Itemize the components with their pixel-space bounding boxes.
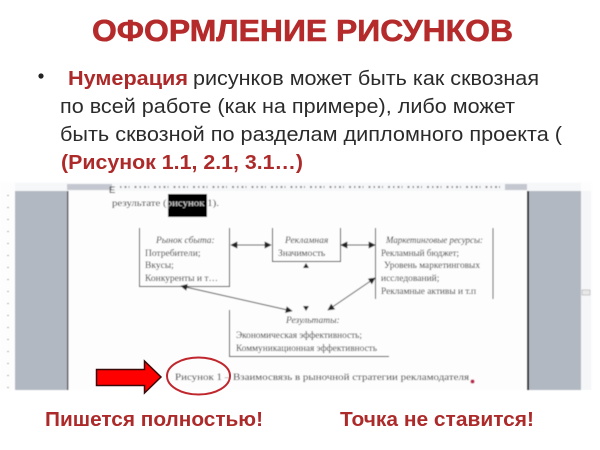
line 1: рисунков может быть как сквозная xyxy=(193,68,539,90)
right gray margin xyxy=(528,191,581,390)
document sentence with selection: результате ( рисунок 1). xyxy=(112,198,219,209)
left ruler xyxy=(7,195,9,388)
line 3: быть сквозной по разделам дипломного проекта ( xyxy=(60,124,562,146)
box: market: Конкуренты и т… xyxy=(145,274,218,284)
box: results: Результаты: xyxy=(285,316,340,326)
line 2: по всей работе (как на примере), либо может xyxy=(60,96,515,118)
arrow: market to advertising xyxy=(231,244,271,246)
box: results xyxy=(230,310,389,356)
red arrow xyxy=(96,361,161,393)
document screenshot xyxy=(0,182,592,390)
bullet text block xyxy=(38,68,562,174)
arrow heads: advertising to results xyxy=(303,263,309,311)
box: market: Рынок сбыта: xyxy=(155,235,215,246)
arrow: market to results xyxy=(181,286,292,311)
arrow: advertising to resources xyxy=(341,244,375,246)
bullet marker xyxy=(38,73,44,79)
scrollbar xyxy=(581,191,591,390)
title: ОФОРМЛЕНИЕ РИСУНКОВ xyxy=(92,13,513,48)
box: market xyxy=(140,228,230,286)
box: marketing resources xyxy=(376,228,493,299)
cursor glyph: Е xyxy=(109,185,115,196)
diagram xyxy=(140,228,493,356)
box: advertising: Рекламная xyxy=(284,236,328,246)
box: marketing resources: Рекламные активы и т.п xyxy=(381,287,476,297)
box: market: Вкусы; xyxy=(145,261,174,271)
white strip under screenshot xyxy=(165,390,235,396)
box: marketing resources: Рекламный бюджет; xyxy=(381,248,459,259)
red circle xyxy=(167,358,230,394)
window background xyxy=(0,182,592,390)
left gray margin xyxy=(15,191,67,390)
box: marketing resources: Уровень маркетинговых xyxy=(384,261,480,271)
box: results: Экономическая эффективность; xyxy=(236,330,362,341)
red period xyxy=(470,380,474,384)
box: marketing resources: исследований; xyxy=(381,273,439,284)
line 4 highlight: (Рисунок 1.1, 2.1, 3.1…) xyxy=(61,152,303,174)
document sentence with selection xyxy=(112,194,219,217)
box: marketing resources: Маркетинговые ресурсы: xyxy=(385,236,483,246)
line 1: Нумерация xyxy=(68,68,188,90)
top ruler xyxy=(15,183,581,191)
arrow: resources to results xyxy=(328,278,375,310)
note: written in full: Пишется полностью! xyxy=(45,409,263,431)
figure caption: Рисунок 1 – Взаимосвязь в рыночной стратегии рекламодателя xyxy=(175,372,470,383)
box: results: Коммуникационная эффективность xyxy=(236,343,378,354)
box: market: Потребители; xyxy=(145,248,200,259)
box: advertising: Значимость xyxy=(278,249,326,259)
note: no period: Точка не ставится! xyxy=(340,409,534,431)
box: advertising xyxy=(272,228,340,262)
